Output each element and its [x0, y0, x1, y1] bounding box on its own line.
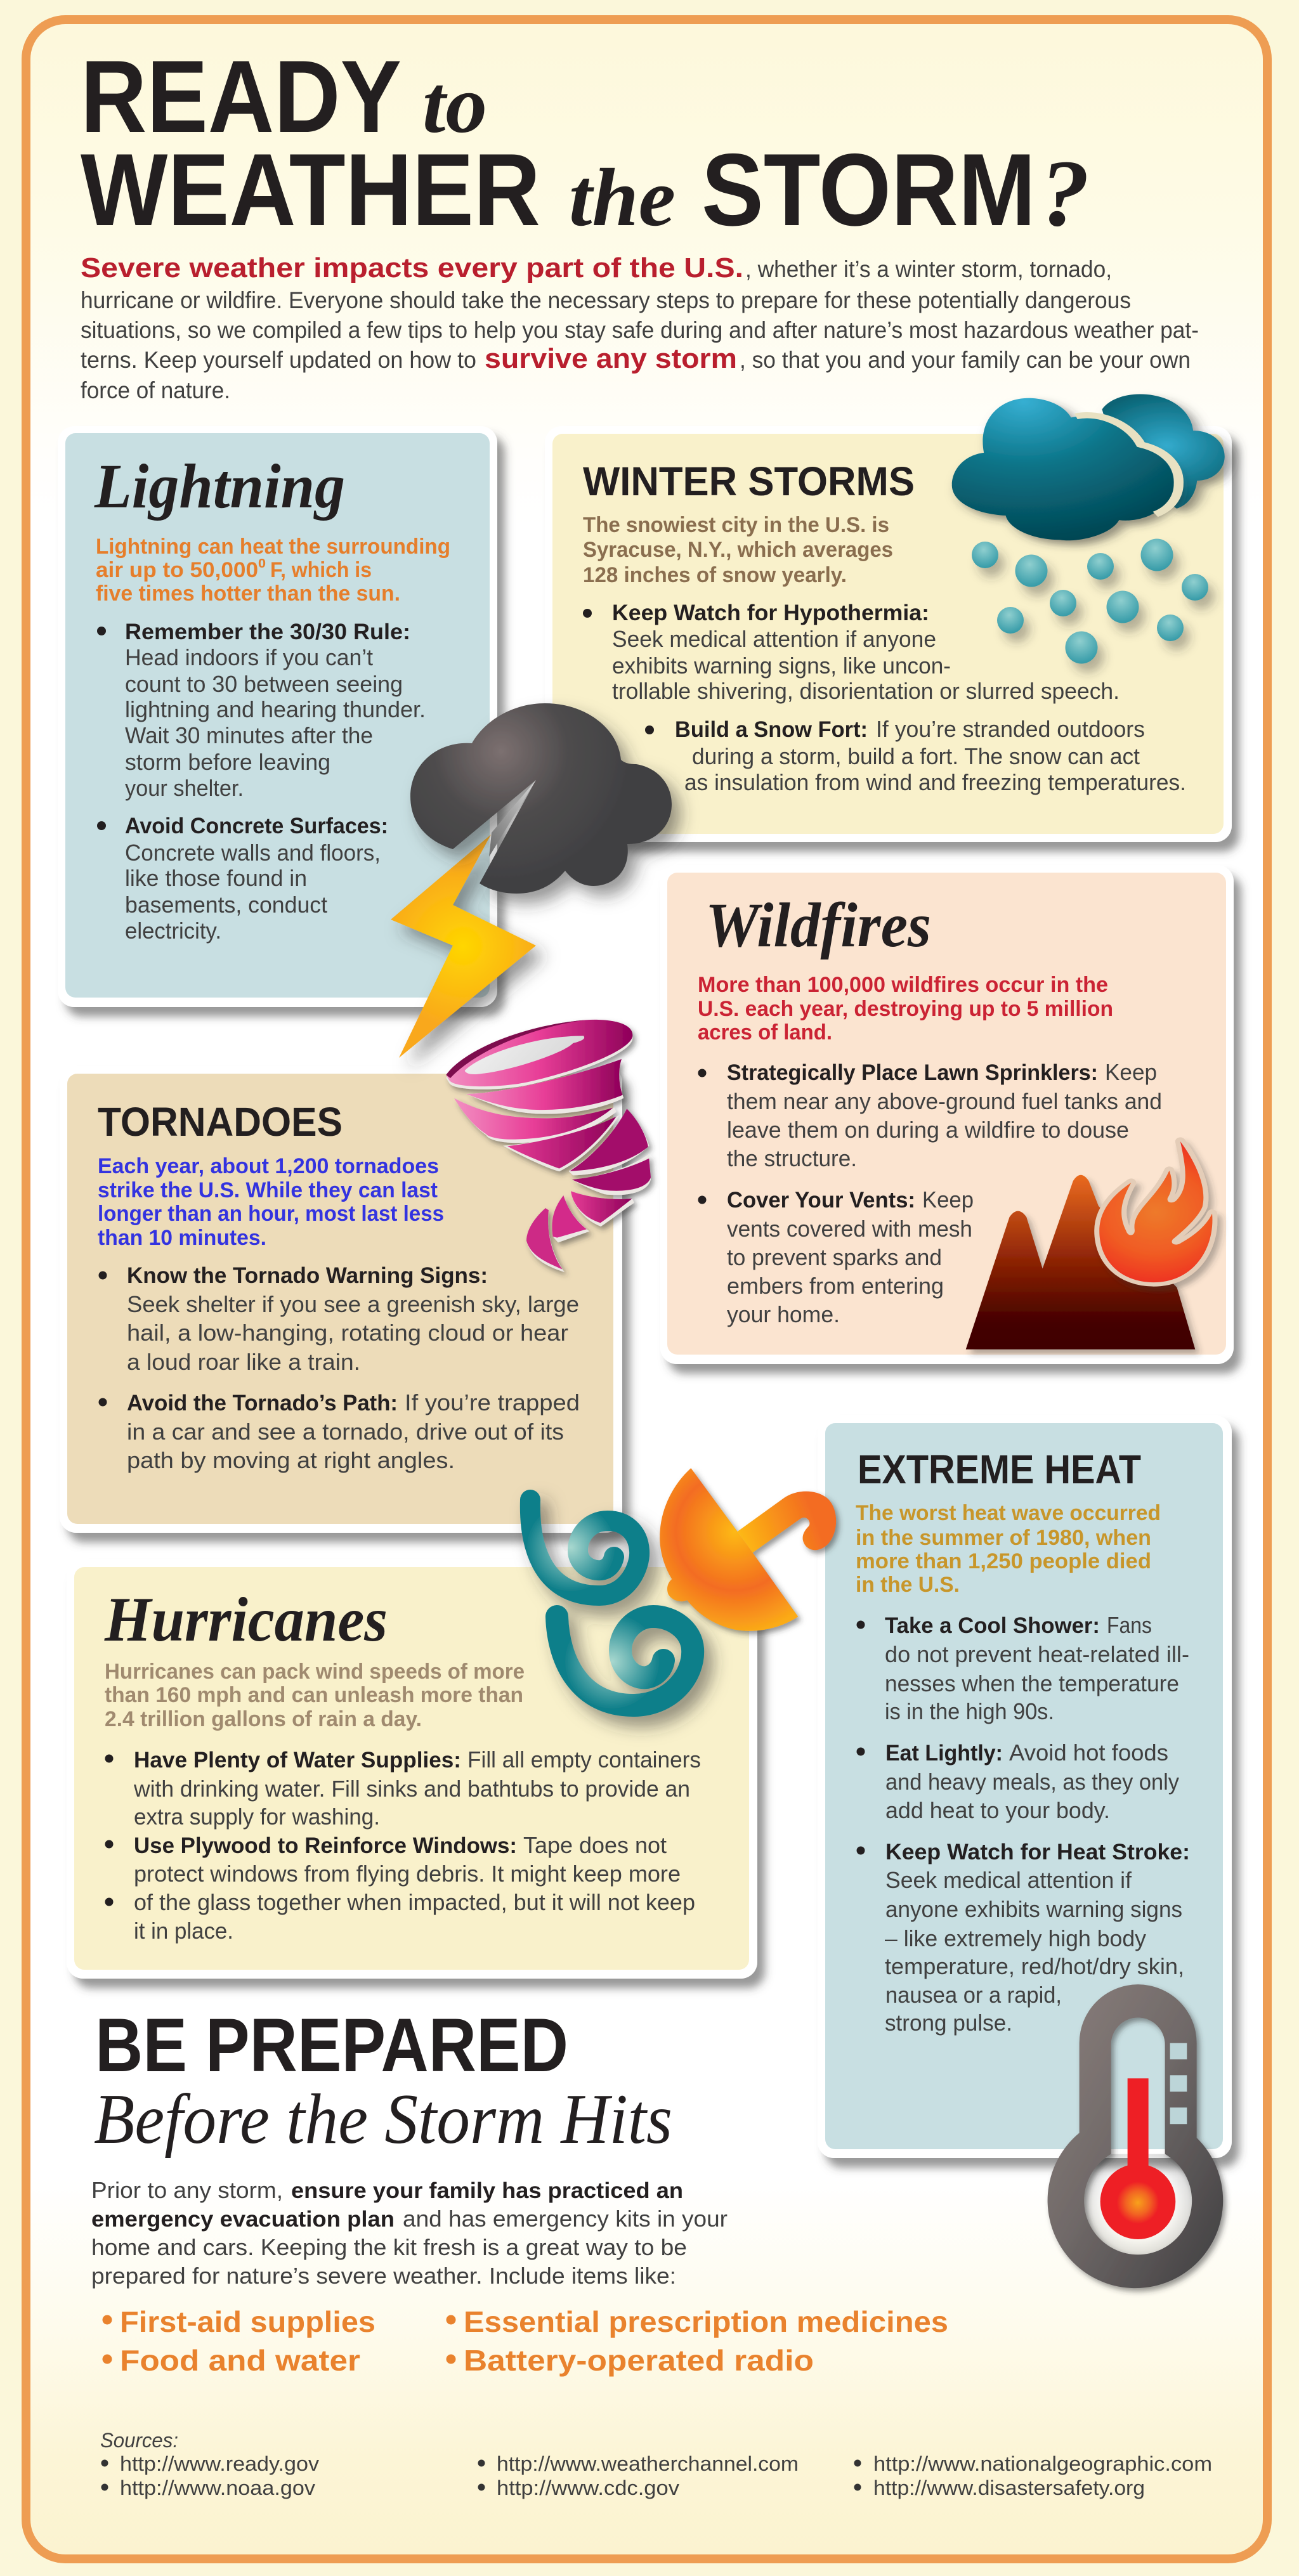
title: to: [422, 59, 487, 150]
tip: tornado path: path by moving at right angles.: [127, 1447, 455, 1473]
heading: Tornadoes: TORNADOES: [98, 1099, 343, 1145]
icon: tornado: [446, 1020, 651, 1272]
tip: 30/30 rule: your shelter.: [125, 775, 244, 801]
stat: wildfires per year: U.S. each year, destroying up to 5 million: [698, 997, 1113, 1021]
sources: http://www.disastersafety.org: [873, 2476, 1145, 2499]
stat: snowiest city: [583, 513, 893, 587]
list: emergency kit items: Food and water: [120, 2344, 360, 2377]
title: the: [569, 152, 676, 244]
panel: tornadoes: [60, 1066, 622, 1533]
tip: cool shower: [856, 1612, 1189, 1724]
intro paragraph: situations, so we compiled a few tips to help you stay safe during and after nature’s most hazardous weather pat-: [81, 317, 1199, 343]
heading: Winter Storms: WINTER STORMS: [583, 459, 915, 504]
tip: concrete surfaces: like those found in: [125, 865, 307, 891]
tip: water supplies: [105, 1747, 701, 1830]
tip: cover vents: Keep: [922, 1187, 974, 1213]
tip: lawn sprinklers: Keep: [1105, 1059, 1157, 1085]
text block: evacuation plan: and has emergency kits in your: [403, 2206, 728, 2232]
sources: http://www.nationalgeographic.com: [873, 2452, 1212, 2475]
heading: Be Prepared: Before the Storm Hits: [94, 2080, 672, 2159]
tip: cover vents: your home.: [727, 1301, 840, 1327]
tip: plywood: it in place.: [134, 1918, 233, 1944]
stat: tornado count: than 10 minutes.: [98, 1226, 266, 1250]
intro paragraph: force of nature.: [81, 377, 230, 403]
tip: cool shower: Take a Cool Shower:: [885, 1613, 1100, 1638]
panel: lightning: [58, 426, 497, 1007]
tip: warning signs: [99, 1263, 579, 1375]
list: emergency kit items: Battery-operated radio: [464, 2344, 814, 2377]
title: STORM: [702, 133, 1036, 247]
stat: worst heat wave: more than 1,250 people died: [856, 1549, 1151, 1573]
stat: snowiest city: 128 inches of snow yearly.: [583, 563, 847, 587]
panel: winter storms: [545, 426, 1232, 842]
sources: Sources:: [100, 2429, 178, 2452]
tip: 30/30 rule: [97, 620, 426, 801]
tip: snow fort: [645, 716, 1186, 795]
list: emergency kit items: [103, 2305, 948, 2377]
tip: cover vents: embers from entering: [727, 1273, 944, 1299]
heading: Wildfires: Wildfires: [705, 890, 931, 960]
tip: plywood: [105, 1832, 695, 1944]
tip: warning signs: Know the Tornado Warning Signs:: [127, 1263, 488, 1288]
tip: concrete surfaces: [97, 814, 388, 944]
tip: lawn sprinklers: [698, 1059, 1162, 1171]
stat: snowiest city: The snowiest city in the U.S. is: [583, 513, 889, 537]
tip: snow fort: as insulation from wind and freezing temperatures.: [684, 769, 1186, 795]
title: READY: [81, 39, 401, 154]
tip: warning signs: a loud roar like a train.: [127, 1349, 360, 1375]
text block: evacuation plan: Prior to any storm,: [91, 2177, 283, 2203]
tip: cover vents: to prevent sparks and: [727, 1244, 942, 1270]
tip: snow fort: during a storm, build a fort. The snow can act: [692, 743, 1140, 769]
stat: lightning heat: 0: [258, 557, 266, 571]
heading: Lightning: Lightning: [94, 451, 345, 521]
icon: dark storm cloud: [410, 703, 672, 894]
sources: http://www.cdc.gov: [497, 2476, 679, 2499]
tip: 30/30 rule: count to 30 between seeing: [125, 671, 403, 697]
icon: snowflakes: [972, 539, 1208, 663]
stat: tornado count: strike the U.S. While they can last: [98, 1178, 438, 1202]
tip: plywood: Tape does not: [523, 1832, 667, 1858]
stat: worst heat wave: [856, 1501, 1161, 1597]
tip: heat stroke: Seek medical attention if: [885, 1867, 1132, 1893]
tip: tornado path: Avoid the Tornado’s Path:: [127, 1391, 398, 1415]
tip: cover vents: [698, 1187, 974, 1327]
stat: wildfires per year: More than 100,000 wildfires occur in the: [698, 973, 1108, 997]
heading: Hurricanes: Hurricanes: [104, 1584, 388, 1655]
tip: lawn sprinklers: the structure.: [727, 1145, 857, 1171]
title: WEATHER: [81, 133, 540, 247]
icon: thermometer: [1048, 1984, 1223, 2288]
tip: hypothermia: Keep Watch for Hypothermia:: [612, 601, 929, 625]
tip: lawn sprinklers: leave them on during a wildfire to douse: [727, 1117, 1129, 1143]
tip: 30/30 rule: lightning and hearing thunder.: [125, 696, 426, 722]
heading: Be Prepared: [94, 2003, 672, 2159]
tip: heat stroke: anyone exhibits warning signs: [885, 1896, 1182, 1922]
tip: warning signs: hail, a low-hanging, rotating cloud or hear: [127, 1320, 568, 1346]
stat: worst heat wave: in the U.S.: [856, 1573, 960, 1597]
icon: teal snow cloud: [952, 394, 1225, 540]
tip: heat stroke: Keep Watch for Heat Stroke:: [885, 1840, 1190, 1864]
title: [81, 39, 1090, 247]
tip: tornado path: If you’re trapped: [405, 1389, 580, 1415]
stat: wind speeds: [105, 1660, 525, 1731]
text block: evacuation plan: home and cars. Keeping the kit fresh is a great way to be: [91, 2234, 687, 2260]
tip: heat stroke: temperature, red/hot/dry skin,: [885, 1953, 1184, 1979]
tip: water supplies: Fill all empty containers: [467, 1747, 701, 1773]
stat: worst heat wave: The worst heat wave occurred: [856, 1501, 1161, 1525]
stat: wildfires per year: acres of land.: [698, 1020, 832, 1044]
tip: snow fort: Build a Snow Fort:: [675, 717, 868, 742]
tip: plywood: Use Plywood to Reinforce Windows:: [134, 1833, 517, 1858]
stat: lightning heat: air up to 50,000: [96, 558, 258, 582]
tip: concrete surfaces: electricity.: [125, 918, 221, 944]
tip: eat lightly: and heavy meals, as they only: [885, 1769, 1179, 1795]
sources: http://www.ready.gov: [120, 2452, 319, 2475]
stat: tornado count: Each year, about 1,200 tornadoes: [98, 1154, 439, 1178]
tip: lawn sprinklers: Strategically Place Lawn Sprinklers:: [727, 1060, 1098, 1085]
tip: cool shower: do not prevent heat-related ill-: [885, 1641, 1189, 1667]
tip: eat lightly: add heat to your body.: [885, 1797, 1110, 1823]
tip: 30/30 rule: Wait 30 minutes after the: [125, 722, 373, 748]
icon: lightning bolt: [391, 835, 536, 1058]
stat: wildfires per year: [698, 973, 1113, 1044]
tip: lawn sprinklers: them near any above-ground fuel tanks and: [727, 1088, 1162, 1114]
tip: plywood: of the glass together when impacted, but it will not keep: [134, 1889, 695, 1915]
text block: evacuation plan: prepared for nature’s severe weather. Include items like:: [91, 2263, 676, 2289]
stat: lightning heat: five times hotter than the sun.: [96, 582, 400, 606]
intro paragraph: terns. Keep yourself updated on how to: [81, 347, 476, 373]
tip: tornado path: in a car and see a tornado, drive out of its: [127, 1419, 564, 1445]
tip: concrete surfaces: Avoid Concrete Surfaces:: [125, 814, 388, 838]
icon: umbrella: [660, 1468, 836, 1631]
text block: evacuation plan: [91, 2177, 728, 2289]
tip: cool shower: is in the high 90s.: [885, 1698, 1054, 1724]
tip: heat stroke: [856, 1840, 1190, 2036]
tip: 30/30 rule: storm before leaving: [125, 749, 330, 775]
intro paragraph: [81, 252, 1199, 403]
tip: cover vents: Cover Your Vents:: [727, 1188, 915, 1213]
sources: http://www.weatherchannel.com: [497, 2452, 799, 2475]
tip: eat lightly: [856, 1740, 1179, 1823]
tip: 30/30 rule: Head indoors if you can’t: [125, 644, 373, 670]
panel: wildfires: [660, 865, 1234, 1364]
intro paragraph: hurricane or wildfire. Everyone should take the necessary steps to prepare for these potentially dangerous: [81, 287, 1131, 313]
tip: water supplies: extra supply for washing.: [134, 1804, 380, 1830]
intro paragraph: , so that you and your family can be your own: [740, 347, 1191, 373]
tip: 30/30 rule: Remember the 30/30 Rule:: [125, 620, 410, 644]
tip: tornado path: [99, 1389, 580, 1473]
stat: tornado count: longer than an hour, most last less: [98, 1202, 444, 1226]
panel: extreme heat: [818, 1415, 1232, 2158]
stat: lightning heat: Lightning can heat the surrounding: [96, 535, 450, 559]
icon: hurricane spirals: [530, 1500, 693, 1705]
stat: wind speeds: than 160 mph and can unleash more than: [105, 1683, 523, 1707]
tip: concrete surfaces: basements, conduct: [125, 892, 327, 918]
tip: heat stroke: – like extremely high body: [885, 1925, 1146, 1951]
list: emergency kit items: First-aid supplies: [120, 2305, 375, 2338]
sources: [100, 2429, 1212, 2499]
stat: wind speeds: Hurricanes can pack wind speeds of more: [105, 1660, 525, 1684]
stat: lightning heat: [96, 535, 450, 606]
tip: heat stroke: strong pulse.: [885, 2010, 1012, 2036]
panel: hurricanes: [67, 1559, 757, 1979]
tip: eat lightly: Eat Lightly:: [885, 1741, 1003, 1766]
stat: snowiest city: Syracuse, N.Y., which averages: [583, 538, 893, 562]
tip: warning signs: Seek shelter if you see a greenish sky, large: [127, 1291, 579, 1317]
icon: wildfire mountain and flame: [966, 1142, 1212, 1350]
tip: plywood: protect windows from flying debris. It might keep more: [134, 1861, 681, 1887]
tip: water supplies: Have Plenty of Water Supplies:: [134, 1748, 461, 1773]
tip: hypothermia: [583, 601, 1119, 704]
tip: heat stroke: nausea or a rapid,: [885, 1982, 1062, 2008]
tip: hypothermia: trollable shivering, disorientation or slurred speech.: [612, 678, 1119, 704]
stat: tornado count: [98, 1154, 444, 1250]
tip: cover vents: vents covered with mesh: [727, 1216, 972, 1242]
text block: evacuation plan: ensure your family has practiced an: [291, 2178, 683, 2203]
list: emergency kit items: Essential prescription medicines: [464, 2305, 948, 2338]
tip: water supplies: with drinking water. Fill sinks and bathtubs to provide an: [133, 1776, 690, 1802]
stat: worst heat wave: in the summer of 1980, when: [856, 1526, 1151, 1550]
text block: evacuation plan: emergency evacuation plan: [91, 2207, 395, 2232]
tip: hypothermia: Seek medical attention if anyone: [612, 626, 936, 652]
intro paragraph: Severe weather impacts every part of the U.S.: [81, 252, 743, 283]
heading: Be Prepared: BE PREPARED: [95, 2003, 568, 2088]
stat: wind speeds: 2.4 trillion gallons of rain a day.: [105, 1707, 422, 1731]
heading: Extreme Heat: EXTREME HEAT: [858, 1447, 1141, 1492]
tip: concrete surfaces: Concrete walls and floors,: [125, 840, 381, 866]
intro paragraph: , whether it’s a winter storm, tornado,: [745, 256, 1112, 282]
title: ?: [1040, 141, 1090, 246]
tip: snow fort: If you’re stranded outdoors: [876, 716, 1145, 742]
tip: eat lightly: Avoid hot foods: [1009, 1740, 1168, 1766]
tip: cool shower: Fans: [1107, 1612, 1152, 1638]
sources: http://www.noaa.gov: [120, 2476, 315, 2499]
tip: cool shower: nesses when the temperature: [885, 1670, 1179, 1696]
intro paragraph: survive any storm: [485, 343, 737, 374]
stat: lightning heat: F, which is: [270, 558, 372, 582]
tip: hypothermia: exhibits warning signs, like uncon-: [612, 653, 951, 679]
